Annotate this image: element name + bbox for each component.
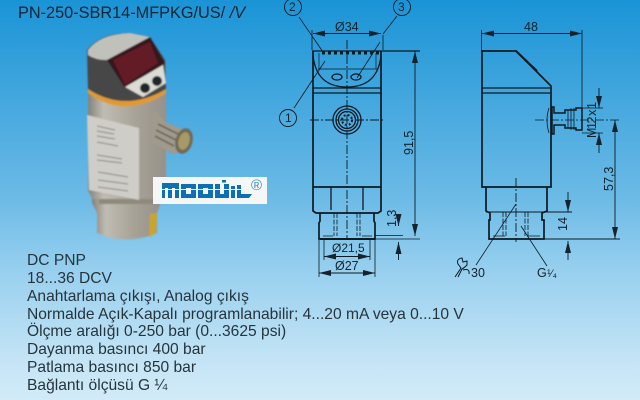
sensor label (87, 115, 139, 200)
dimension labels: M12 x 1 (585, 102, 599, 138)
dimension labels: Ø34 (335, 20, 359, 34)
icon: pressure sensor photo (87, 33, 196, 240)
dim M12 (598, 88, 600, 108)
dimension labels: 1 (285, 111, 292, 125)
specifications text block: DC PNP (27, 252, 86, 269)
connector (149, 112, 190, 154)
specifications text block: Bağlantı ölçüsü G ¼ (27, 377, 167, 394)
M12 connector (552, 107, 582, 134)
technical drawing: side view (455, 30, 620, 277)
logo box (153, 177, 267, 204)
dimension labels: G (537, 266, 547, 280)
orange ring (88, 89, 166, 106)
display panel (125, 65, 166, 97)
dimension labels: 48 (524, 20, 538, 34)
dimension labels: 14 (556, 217, 570, 231)
dimension labels: 3 (398, 0, 405, 14)
process connection (319, 213, 375, 239)
display head (87, 33, 166, 102)
title: PN-250-SBR14-MFPKG/US/ /V (18, 4, 245, 22)
buttons (140, 83, 150, 93)
logo wordmark (162, 180, 252, 198)
specifications text block: Normalde Açık-Kapalı programlanabilir; 4...20 mA veya 0...10 V (27, 306, 464, 323)
display arc (313, 55, 381, 87)
dimension labels: 1,3 (385, 210, 399, 227)
specifications text block: Patlama basıncı 850 bar (27, 359, 196, 376)
dim 57.3 (614, 120, 616, 239)
dimension labels: 91,5 (402, 131, 416, 155)
dimension labels: 57,3 (602, 167, 616, 191)
side process connection (486, 187, 547, 239)
dim 48 (482, 30, 582, 108)
front body outline (313, 51, 381, 213)
dim 14 (567, 192, 569, 212)
specifications text block: Ölçme aralığı 0-250 bar (0...3625 psi) (27, 323, 286, 340)
dimension labels: 30 (471, 266, 485, 280)
registered mark: ® (251, 177, 262, 194)
specifications text block: 18...36 DCV (27, 270, 112, 287)
dim 21.5 / 27 (319, 240, 375, 277)
dimension labels: Ø27 (335, 259, 359, 273)
dimension labels: ¹⁄₄ (547, 268, 558, 280)
sensor stem (92, 195, 160, 240)
sensor body (88, 92, 166, 199)
specifications text block: Anahtarlama çıkışı, Analog çıkış (27, 288, 249, 305)
specifications text block: Dayanma basıncı 400 bar (27, 341, 206, 358)
dim 1.3 (398, 214, 400, 226)
dim 34 (312, 30, 383, 50)
dimension labels: 2 (289, 0, 296, 14)
specifications text block (27, 252, 464, 394)
dim 91.5 (414, 51, 416, 236)
leaders (299, 17, 323, 52)
technical drawing: front view (280, 0, 420, 277)
callouts (284, 0, 302, 16)
centre line (346, 40, 348, 240)
side body outline (482, 51, 551, 187)
dimension labels: Ø21,5 (332, 241, 365, 255)
electrical connector face (310, 106, 385, 134)
leaders (476, 204, 547, 266)
icon: wrench (455, 258, 469, 277)
dimension labels (285, 0, 616, 280)
